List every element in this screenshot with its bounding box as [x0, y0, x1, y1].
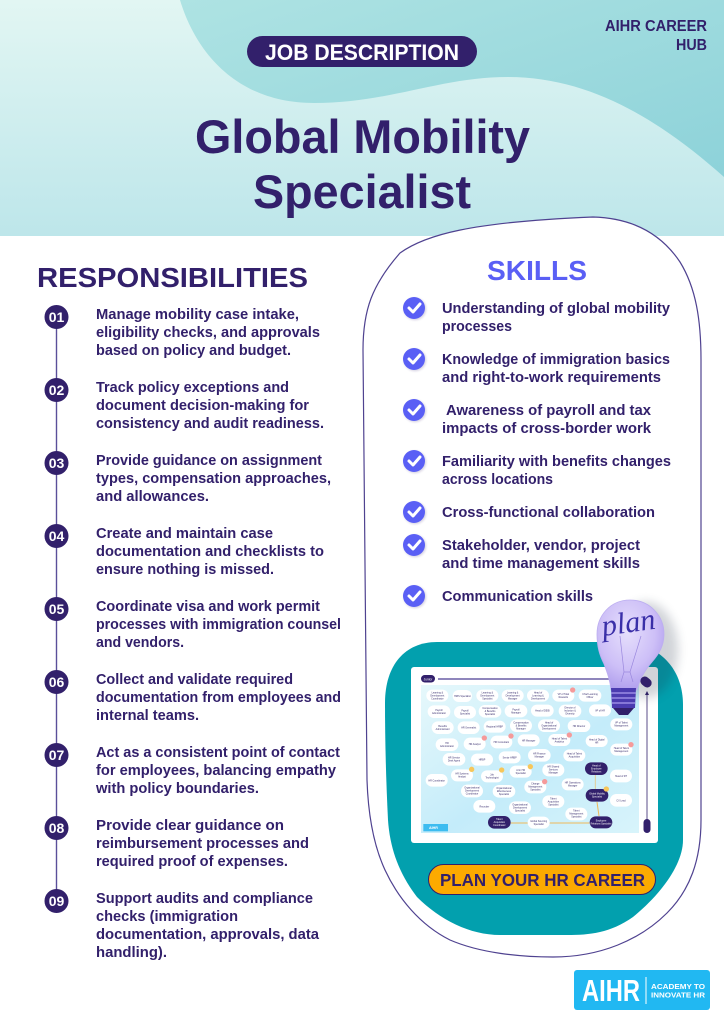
responsibility 03: Provide guidance on assignment	[96, 453, 322, 469]
career map screen	[411, 667, 658, 843]
job role pills: Change	[531, 783, 539, 786]
job role pills: Manager	[511, 711, 521, 714]
job role pills: Technologist	[485, 777, 499, 780]
job role pills: HRIS Specialist	[454, 695, 471, 698]
job role pills	[426, 690, 632, 829]
job role pills: HR Generalist	[461, 727, 476, 730]
highlighted path roles: Relations Specialist	[591, 823, 612, 826]
responsibility 09: documentation, approvals, data	[96, 927, 320, 943]
job role pills: Compensation	[513, 721, 529, 724]
job role pills: Payroll	[435, 709, 443, 712]
job role pills: Management	[614, 750, 629, 753]
job role pills: Payroll	[461, 710, 469, 713]
job role pills: Management	[614, 725, 629, 728]
job description badge: JOB DESCRIPTION	[265, 40, 459, 65]
skill 2: Knowledge of immigration basics	[442, 352, 670, 368]
job role pills: HR Analyst	[469, 743, 481, 746]
number markers: 06	[49, 674, 64, 690]
job role pills: & Benefits	[516, 724, 527, 727]
job role pills: Development	[430, 694, 445, 697]
skill 6: and time management skills	[442, 556, 640, 572]
job role pills: Acquisition	[548, 800, 560, 803]
responsibility 03: and allowances.	[96, 489, 209, 505]
job role pills: Specialist	[499, 793, 509, 796]
responsibility 05: processes with immigration counsel	[96, 617, 341, 633]
job role pills: Specialist	[460, 713, 470, 716]
job role pills: Senior HRBP	[503, 756, 517, 759]
job role pills: Specialist	[534, 823, 544, 826]
heading: skills: SKILLS	[487, 255, 587, 286]
number markers: 02	[49, 382, 64, 398]
header background	[0, 0, 724, 236]
job role pills: HR Finance	[533, 753, 546, 756]
hub label: HUB	[676, 37, 707, 54]
skill 3: impacts of cross-border work	[442, 421, 652, 437]
job role pills: Development	[465, 790, 479, 793]
job role pills: Manager	[549, 772, 558, 775]
skill 1: processes	[442, 319, 512, 335]
job role pills: HR Systems	[455, 773, 469, 776]
job role pills: Benefits	[438, 725, 447, 728]
skill 4	[403, 450, 671, 488]
job role pills: HRBP	[479, 759, 486, 762]
responsibility 01: eligibility checks, and approvals	[96, 325, 320, 341]
timeline line	[56, 317, 58, 902]
responsibility 01: Manage mobility case intake,	[96, 307, 299, 323]
hub label	[605, 18, 707, 54]
job role pills: Analyst	[458, 776, 466, 779]
job role pills: Specialist	[530, 789, 541, 792]
job role pills: Head of RT	[615, 775, 628, 778]
highlighted path roles	[488, 762, 612, 829]
role badges	[469, 687, 634, 792]
responsibility 03: types, compensation approaches,	[96, 471, 331, 487]
responsibility 02: document decision-making for	[96, 398, 309, 414]
skill 7	[403, 585, 593, 607]
highlighted path roles: Global Mobility	[589, 793, 605, 796]
panel: skills outline	[363, 217, 701, 957]
job role pills: Compensation	[482, 707, 498, 710]
job role pills: Head of Digital	[589, 738, 604, 741]
job role pills: Director of	[565, 706, 575, 709]
job role pills: CX Lead	[616, 799, 626, 802]
responsibility 07: for employees, balancing empathy	[96, 763, 336, 779]
skill 2	[403, 348, 670, 386]
responsibility 08	[96, 818, 309, 870]
responsibility 02	[96, 380, 324, 432]
job role pills: HR Coordinator	[428, 779, 445, 782]
job role pills: HR Operations	[565, 782, 581, 785]
job role pills: Development	[480, 694, 495, 697]
responsibility 06: internal teams.	[96, 708, 199, 724]
bulb shadow	[614, 602, 678, 698]
job role pills: HR Consultant	[494, 741, 509, 744]
seniority axis vertical	[644, 691, 650, 833]
job role pills: Desk Agent	[448, 760, 460, 763]
job role pills: Manager	[508, 697, 518, 700]
responsibility 05: and vendors.	[96, 635, 184, 651]
responsibility 09: handling).	[96, 945, 167, 961]
job role pills: Manager	[516, 727, 526, 730]
job role pills: Manager	[568, 785, 578, 788]
job role pills: Recruiter	[480, 805, 489, 808]
plan your career button: PLAN YOUR HR CAREER	[440, 870, 645, 890]
job role pills: Specialist	[482, 697, 493, 700]
highlighted path roles: Acquisition	[494, 821, 506, 824]
responsibility 07: with policy boundaries.	[95, 781, 259, 797]
job role pills: Head of	[545, 721, 553, 724]
job role pills: Learning &	[432, 691, 443, 694]
AIHR logo	[574, 970, 710, 1010]
job role pills: Management	[528, 786, 543, 789]
AIHR logo: ACADEMY TO	[651, 982, 705, 991]
responsibility 07: Act as a consistent point of contact	[96, 745, 340, 761]
bulb filament	[620, 636, 641, 682]
job role pills: Specialist	[571, 816, 582, 819]
panel: career map callout	[385, 642, 683, 935]
skill 6	[403, 534, 640, 572]
job role pills: Administrator	[440, 745, 454, 748]
job role pills: Development	[542, 727, 556, 730]
skill 6: Stakeholder, vendor, project	[442, 538, 640, 554]
job role pills: HR	[595, 741, 599, 744]
skill 3: Awareness of payroll and tax	[446, 403, 651, 419]
job role pills: Management	[569, 813, 584, 816]
job role pills: Administrator	[432, 712, 446, 715]
number markers: 01	[49, 309, 64, 325]
number markers: 03	[49, 455, 64, 471]
responsibilities list	[95, 307, 341, 961]
map logo: AIHR	[429, 826, 438, 830]
job role pills: Diversity	[565, 712, 575, 715]
highlighted path roles: Talent	[496, 818, 503, 821]
job role pills: Specialist	[548, 803, 559, 806]
job role pills: Learning &	[507, 691, 518, 694]
job role pills: Rewards	[559, 696, 569, 699]
responsibility 01: based on policy and budget.	[96, 343, 291, 359]
responsibility 06: Collect and validate required	[96, 672, 293, 688]
title	[195, 110, 530, 218]
job role pills: HR Service	[448, 757, 460, 760]
number markers	[44, 305, 68, 913]
responsibility 03	[96, 453, 331, 505]
heading: responsibilities: RESPONSIBILITIES	[37, 262, 308, 293]
job role pills: Organizational	[496, 787, 512, 790]
job role pills: Development	[506, 694, 520, 697]
responsibility 04	[96, 526, 324, 578]
number markers: 05	[49, 601, 64, 617]
job role pills: Specialist	[516, 772, 526, 775]
responsibility 08: required proof of expenses.	[96, 854, 288, 870]
responsibility 06	[96, 672, 341, 724]
job role pills: Specialist	[515, 809, 525, 812]
career map background	[421, 685, 639, 833]
responsibility 09: Support audits and compliance	[96, 891, 313, 907]
number markers: 04	[49, 528, 64, 544]
responsibility 05	[96, 599, 341, 651]
job role pills: & Benefits	[485, 710, 496, 713]
number markers: 08	[49, 820, 64, 836]
skill 4: Familiarity with benefits changes	[442, 454, 671, 470]
skill 7: Communication skills	[442, 589, 593, 605]
skill 2: and right-to-work requirements	[442, 370, 661, 386]
number markers: 09	[49, 893, 64, 909]
job role pills: Head of DEIB	[535, 710, 550, 713]
job role pills: VP of Total	[558, 693, 569, 696]
job role pills: Regional HRBP	[486, 726, 503, 729]
number markers: 07	[49, 747, 64, 763]
job role pills: Acquisition	[569, 756, 581, 759]
responsibility 02: Track policy exceptions and	[96, 380, 289, 396]
icon: light bulb with the word plan	[597, 600, 664, 715]
job role pills: Coordinator	[431, 697, 444, 700]
skill 4: across locations	[442, 472, 553, 488]
timeline	[44, 305, 68, 913]
job role pills: VP of HR	[595, 709, 605, 712]
hub label: AIHR CAREER	[605, 18, 707, 35]
job role pills: Officer	[587, 696, 594, 699]
job role pills: HR Director	[573, 725, 585, 728]
plan your career button	[428, 864, 656, 894]
job role pills: Talent	[550, 797, 557, 800]
title: Specialist	[253, 165, 471, 218]
responsibility 09	[96, 891, 320, 961]
skill 5: Cross-functional collaboration	[442, 505, 655, 521]
responsibility 01	[96, 307, 320, 359]
career map nodes	[423, 687, 634, 831]
highlighted path roles: Coordinator	[493, 824, 506, 827]
job role pills: Development	[531, 697, 545, 700]
responsibility 04: Create and maintain case	[96, 526, 273, 542]
job role pills: Learning &	[532, 694, 544, 697]
highlighted path roles: Employee	[591, 767, 602, 770]
bulb word: plan	[597, 603, 657, 643]
job role pills: Head of Talent	[552, 737, 567, 740]
highlighted path roles: Specialist	[592, 796, 602, 799]
job role pills: Effectiveness	[497, 790, 512, 793]
responsibility 05: Coordinate visa and work permit	[96, 599, 320, 615]
responsibility 08: Provide clear guidance on	[96, 818, 284, 834]
job role pills: Specialist	[485, 713, 495, 716]
job role pills: HR Shared	[547, 766, 559, 769]
skill 3	[403, 399, 652, 437]
job role pills: Chief Learning	[582, 693, 598, 696]
skills list	[403, 297, 671, 607]
responsibility 08: reimbursement processes and	[96, 836, 309, 852]
map logo	[423, 824, 448, 831]
skill 1: Understanding of global mobility	[442, 301, 670, 317]
job role pills: Head of Talent	[567, 753, 582, 756]
highlighted path roles: Employee	[596, 820, 606, 823]
responsibility 09: checks (immigration	[96, 909, 238, 925]
skill 5	[403, 501, 655, 523]
job role pills: Organizational	[512, 803, 528, 806]
job role pills: HR	[445, 742, 449, 745]
job role pills: Inclusion &	[564, 709, 576, 712]
job role pills: Manager	[535, 756, 544, 759]
career path connectors	[511, 775, 599, 823]
job role pills: Coordinator	[466, 793, 478, 796]
job role pills: Talent	[573, 810, 580, 813]
responsibility 04: ensure nothing is missed.	[96, 562, 274, 578]
responsibility 02: consistency and audit readiness.	[96, 416, 324, 432]
bulb screw base	[611, 688, 636, 715]
title: Global Mobility	[195, 110, 530, 163]
responsibility 07	[95, 745, 340, 797]
job role pills: Payroll	[512, 708, 520, 711]
highlighted path roles: Relations	[591, 770, 602, 773]
job role pills: Development	[513, 806, 527, 809]
job role pills: Head of	[534, 691, 542, 694]
AIHR logo: AIHR	[582, 973, 640, 1008]
job role pills: Organizational	[541, 724, 557, 727]
highlighted path roles: Head of	[592, 764, 600, 767]
bulb glass	[597, 600, 664, 690]
job role pills: Head of Talent	[614, 747, 629, 750]
job role pills: Global Sourcing	[530, 820, 547, 823]
job role pills: Job	[490, 774, 494, 777]
AIHR logo: INNOVATE HR	[651, 990, 706, 1000]
senior tag	[639, 675, 653, 689]
responsibility 04: documentation and checklists to	[96, 544, 324, 560]
job role pills: Administrator	[436, 728, 450, 731]
job role pills: Services	[549, 769, 559, 772]
skill 1	[403, 297, 670, 335]
responsibility 06: documentation from employees and	[96, 690, 341, 706]
job role pills: AI in HR	[516, 769, 525, 772]
job role pills: HR Manager	[522, 739, 536, 742]
job role pills: Learning &	[482, 691, 493, 694]
job role pills: Organizational	[464, 787, 480, 790]
job role pills: VP of Talent	[615, 722, 628, 725]
job role pills: Analytics	[555, 740, 565, 743]
seniority axis horizontal: Junior	[424, 678, 433, 682]
seniority axis horizontal	[421, 675, 640, 682]
